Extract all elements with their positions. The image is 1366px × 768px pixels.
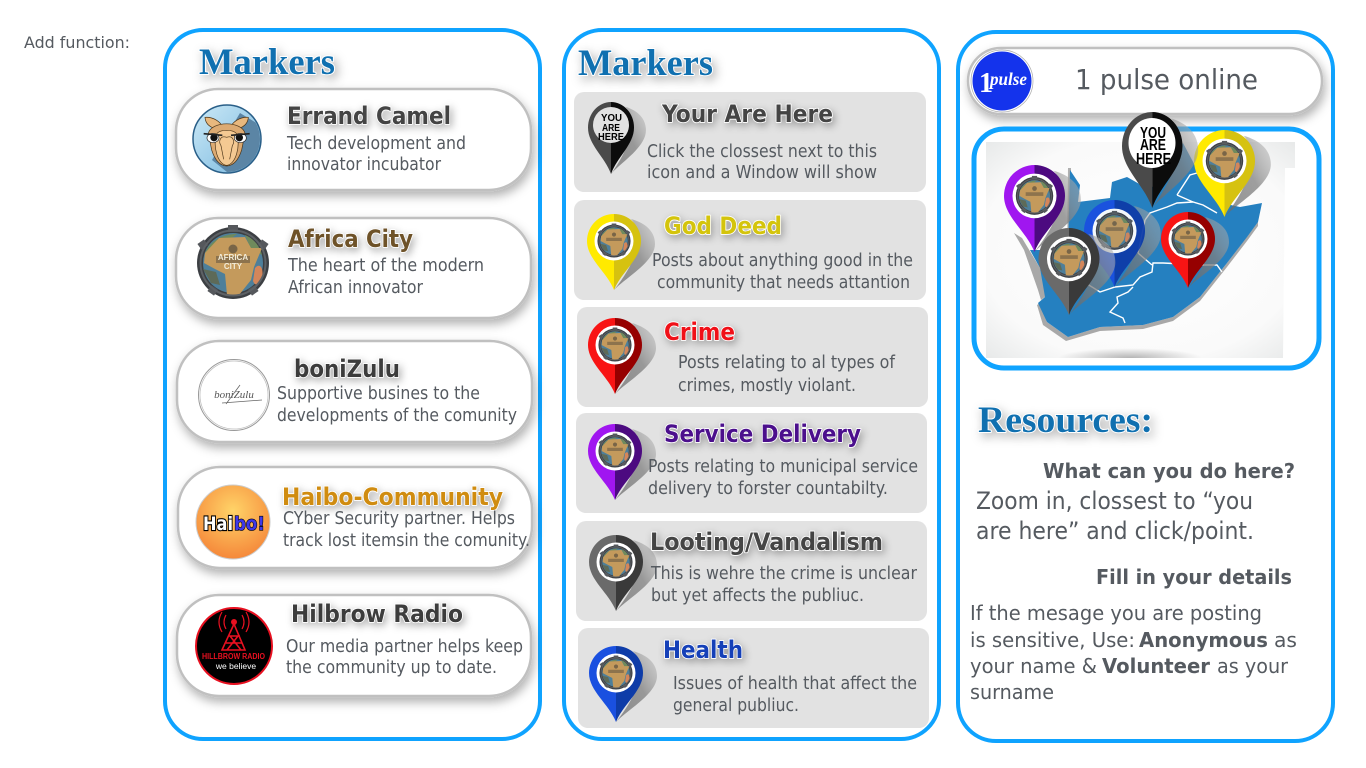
text: anonymous instructions: surname [970,680,1054,704]
title: Health [663,636,743,664]
card: good deed [574,200,926,300]
map: South Africa [986,142,1295,368]
text: anonymous instructions [970,601,1297,704]
description [283,509,530,551]
text: anonymous instructions: your name & [970,654,1097,678]
description: community that needs attantion [657,273,910,293]
pin: grey [1038,228,1115,315]
subheading: what can you do here: What can you do here? [1043,459,1295,483]
description [650,564,918,606]
text: zoom instructions: Zoom in, clossest to “you [976,487,1253,515]
name: Haibo-Community: Haibo-Community [282,483,503,511]
icon: Africa City logo: AFRICA [218,253,248,262]
pin: purple [1004,165,1081,252]
panel: marker types [564,30,939,739]
heading: markers: Markers [199,42,335,83]
title: 1 pulse online [1075,63,1258,96]
icon: Hillbrow Radio logo [196,608,272,684]
title: Service Delivery [664,420,861,448]
header: 1 pulse online [968,48,1322,114]
icon: blue pin [589,646,657,722]
icon: boniZulu logo: boniZulu [214,389,254,401]
title: God Deed [664,212,782,240]
text: anonymous instructions: If the mesage you are posting [970,601,1262,625]
name: boniZulu: boniZulu [294,355,400,383]
text: anonymous instructions: Anonymous [1139,628,1268,652]
name: Hilbrow Radio: Hilbrow Radio [291,600,463,628]
map frame [974,112,1319,368]
pin: you are here [1122,112,1198,208]
description: Click the clossest next to this [647,142,877,162]
description [673,674,917,716]
pin: you are here: HERE [1136,151,1171,168]
title: Crime [664,318,735,346]
description: Posts about anything good in the [652,251,913,271]
description [287,256,484,298]
card: Errand Camel [176,89,531,190]
description: crimes, mostly violant. [678,376,856,396]
icon: Hillbrow Radio logo: we believe [215,661,256,671]
icon: Haibo logo [196,485,270,559]
description: Issues of health that affect the [673,674,917,694]
description: This is wehre the crime is unclear [650,564,918,584]
icon: 1pulse logo: pulse [988,69,1027,89]
icon: red pin [588,318,656,394]
card: service delivery [576,413,927,513]
label: add function: Add function: [24,33,130,52]
description [678,353,896,396]
description [652,251,913,293]
description [286,637,523,678]
icon: yellow pin [587,214,655,290]
pin: red [1161,212,1229,288]
name: Africa City: Africa City [288,225,413,253]
description: The heart of the modern [287,256,484,276]
description: Our media partner helps keep [286,637,523,657]
icon: you are here pin [588,102,646,174]
icon: purple pin [588,424,656,500]
text: anonymous instructions: Volunteer [1102,654,1211,678]
icon: Haibo logo: bo! [234,513,265,535]
card: health [578,628,929,728]
description [286,134,466,175]
description: delivery to forster countabilty. [648,479,888,499]
icon: Hillbrow Radio logo: HILLBROW RADIO [202,652,265,661]
description: Supportive busines to the [277,384,480,404]
text: zoom instructions [976,487,1254,545]
description [647,142,877,183]
panel: partners markers [165,30,540,739]
panel: 1 pulse online and resources [958,32,1333,741]
icon: Africa City logo: CITY [224,262,243,271]
name: Errand Camel: Errand Camel [287,102,451,130]
pin: you are here: ARE [1140,137,1166,154]
card: crime [577,307,928,407]
card: boniZulu [177,341,532,442]
description: Posts relating to municipal service [648,457,918,477]
card: Hilbrow Radio [177,595,531,696]
description: African innovator [288,278,424,298]
text: anonymous instructions: is sensitive, Use: [970,628,1135,652]
description: CYber Security partner. Helps [283,509,515,529]
pin: blue [1084,200,1161,287]
description: Posts relating to al types of [678,353,896,373]
description: the community up to date. [286,658,497,678]
card: You are here [574,92,926,192]
text: anonymous instructions: as [1274,628,1297,652]
icon: boniZulu logo [198,360,270,430]
description: icon and a Window will show [647,163,877,183]
icon: 1pulse logo: 1 [979,67,993,99]
icon: Africa City logo [197,225,269,299]
description: general publiuc. [673,696,799,716]
subheading: fill in your details: Fill in your details [1096,565,1292,589]
icon: 1pulse logo [971,50,1033,112]
card: Africa City [176,218,531,318]
description: developments of the comunity [277,406,517,426]
icon: you are here pin: YOU [601,112,622,124]
heading: markers: Markers [578,43,713,84]
pin: yellow [1194,130,1271,217]
card: looting and vandalism [576,521,927,621]
description: Tech development and [286,134,466,154]
description [277,384,517,426]
icon: you are here pin: HERE [598,131,624,143]
title: Your Are Here [661,100,833,128]
description [648,457,918,499]
description: but yet affects the publiuc. [651,586,864,606]
icon: grey pin [589,535,657,611]
heading: resources: Resources: [978,400,1153,441]
card: Haibo-Community [178,467,532,568]
description: track lost itemsin the comunity. [283,531,530,551]
pin: you are here: YOU [1140,125,1166,142]
text: zoom instructions: are here” and click/point. [976,517,1254,545]
icon: Haibo logo: Hai [203,513,233,535]
description: innovator incubator [287,155,442,175]
title: Looting/Vandalism [650,528,883,556]
text: anonymous instructions: as your [1217,654,1289,678]
icon: you are here pin: ARE [602,122,620,134]
icon: camel logo [193,105,268,176]
